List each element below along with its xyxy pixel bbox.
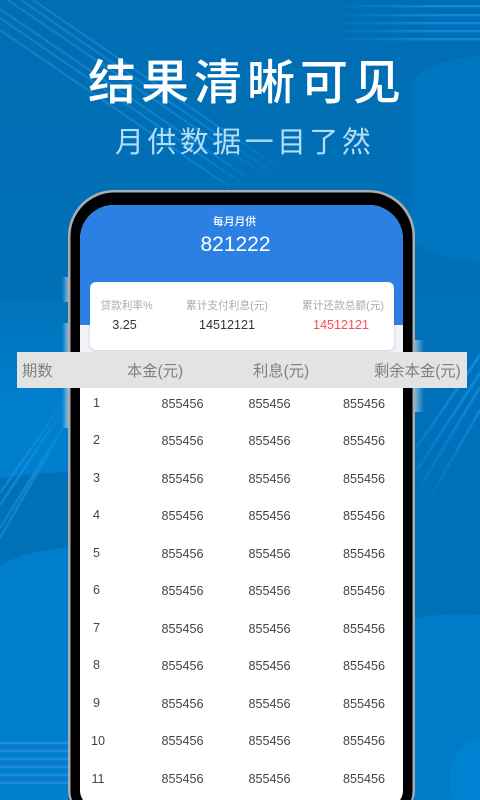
row 1: 855456	[343, 397, 385, 411]
monthly label: 每月月供	[213, 216, 256, 228]
row 11: 11	[91, 772, 105, 786]
row 7: 855456	[161, 622, 204, 636]
row 8: 855456	[343, 659, 385, 673]
rate value: 3.25	[112, 318, 137, 332]
row 3	[93, 471, 385, 486]
total label: 累计还款总额(元)	[302, 300, 384, 312]
title: 结果清晰可见	[88, 57, 406, 110]
row 9: 855456	[343, 697, 385, 711]
row 4: 855456	[343, 509, 385, 523]
row 7: 7	[93, 621, 100, 635]
row 7: 855456	[343, 622, 385, 636]
row 9: 855456	[161, 697, 204, 711]
row 3: 855456	[161, 472, 204, 486]
row 9	[93, 696, 385, 711]
interest value: 14512121	[199, 318, 255, 332]
row 10: 855456	[343, 734, 385, 748]
row 7: 855456	[248, 622, 291, 636]
row 8: 855456	[161, 659, 204, 673]
row 10	[91, 734, 385, 748]
row 4: 4	[93, 508, 100, 522]
row 4: 855456	[161, 509, 204, 523]
row 9: 9	[93, 696, 100, 710]
row 6: 855456	[248, 584, 291, 598]
row 1: 1	[93, 396, 100, 410]
row 9: 855456	[248, 697, 291, 711]
row 2: 855456	[161, 434, 204, 448]
row 1: 855456	[248, 397, 291, 411]
row 1: 855456	[161, 397, 204, 411]
phone	[68, 190, 415, 800]
row 11: 855456	[161, 772, 204, 786]
interest label: 累计支付利息(元)	[186, 300, 268, 312]
row 3: 855456	[343, 472, 385, 486]
row 11	[91, 772, 385, 786]
row 2: 2	[93, 433, 100, 447]
row 5: 5	[93, 546, 100, 560]
table rows	[91, 396, 385, 786]
row 11: 855456	[343, 772, 385, 786]
row 2: 855456	[343, 434, 385, 448]
table header	[17, 352, 467, 388]
row 6: 855456	[343, 584, 385, 598]
row 3: 855456	[248, 472, 291, 486]
row 8	[93, 658, 385, 673]
row 5: 855456	[343, 547, 385, 561]
row 8: 8	[93, 658, 100, 672]
col principal: 本金(元)	[127, 363, 183, 380]
row 2	[93, 433, 385, 448]
row 6: 6	[93, 583, 100, 597]
monthly value: 821222	[200, 233, 271, 256]
col balance: 剩余本金(元)	[374, 363, 461, 380]
row 10: 855456	[161, 734, 204, 748]
row 4: 855456	[248, 509, 291, 523]
row 2: 855456	[248, 434, 291, 448]
total value: 14512121	[313, 318, 369, 332]
row 6: 855456	[161, 584, 204, 598]
summary card	[90, 282, 394, 350]
col interest: 利息(元)	[253, 363, 309, 380]
row 4	[93, 508, 385, 523]
row 5: 855456	[248, 547, 291, 561]
row 10: 855456	[248, 734, 291, 748]
subtitle: 月供数据一目了然	[115, 126, 374, 158]
col period: 期数	[22, 363, 53, 380]
row 11: 855456	[248, 772, 291, 786]
row 7	[93, 621, 385, 636]
row 1	[93, 396, 385, 411]
row 3: 3	[93, 471, 100, 485]
row 5: 855456	[161, 547, 204, 561]
rate label: 贷款利率%	[100, 300, 153, 312]
row 8: 855456	[248, 659, 291, 673]
row 6	[93, 583, 385, 598]
row 5	[93, 546, 385, 561]
row 10: 10	[91, 734, 105, 748]
